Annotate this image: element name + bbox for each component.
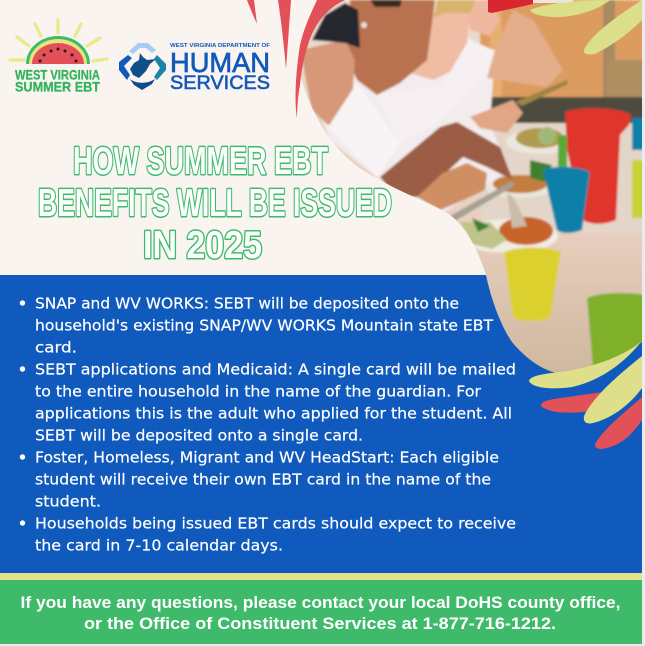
bulleted list [20, 294, 516, 554]
far hand [470, 100, 523, 133]
center white shirt [466, 38, 492, 50]
decorative leaves bottom right [529, 342, 642, 449]
back child [465, 0, 563, 87]
bullet: Foster, Homeless, Migrant and WV HeadStart: Foster, Homeless, Migrant and WV HeadStart: Each eligible [35, 448, 499, 466]
bullet: SEBT applications and Medicaid: SEBT will be deposited onto a single card. [35, 426, 363, 444]
girl face [347, 0, 435, 95]
fork [507, 193, 527, 228]
footer contact text: or the Office of Constituent Services at 1-877-716-1212. [84, 614, 556, 633]
blue content panel [0, 275, 642, 573]
title [38, 140, 392, 267]
logo wordmark [15, 66, 100, 94]
bullet: Households being issued EBT cards: the card in 7-10 calendar days. [35, 536, 283, 554]
title: BENEFITS WILL BE ISSUED [38, 182, 392, 225]
icon: watermelon [26, 36, 90, 64]
photo: children eating lunch [295, 0, 645, 380]
bullet: SNAP and WV WORKS: household's existing SNAP/WV WORKS Mountain state EBT [35, 316, 494, 334]
cutlery held [515, 80, 568, 106]
green cup [586, 292, 642, 366]
red pitcher [565, 108, 631, 224]
girl arm and hand [380, 122, 513, 197]
bullet: Foster, Homeless, Migrant and WV HeadStart: student. [35, 492, 101, 510]
bullet: Foster, Homeless, Migrant and WV HeadStart: student will receive their own EBT card in the name of the [35, 470, 491, 488]
left child [300, 3, 360, 125]
plate back [506, 127, 574, 154]
logo: WV Department of Human Services [119, 43, 270, 94]
near hand [417, 163, 487, 210]
footer contact text [20, 593, 620, 633]
yellow divider band [0, 573, 642, 580]
department wordmark [170, 43, 270, 94]
icon: diamond with state outline [119, 43, 166, 90]
department wordmark: HUMAN [170, 47, 270, 78]
bullet: Households being issued EBT cards: Households being issued EBT cards should expect to receive [35, 514, 516, 532]
department wordmark: WEST VIRGINIA DEPARTMENT OF [170, 43, 270, 49]
blue cup [543, 167, 590, 233]
title: HOW SUMMER EBT [73, 140, 328, 183]
bullet: SNAP and WV WORKS [20, 294, 494, 356]
decorative leaves top right [488, 0, 642, 54]
bullet: SNAP and WV WORKS: SNAP and WV WORKS: SEBT will be deposited onto the [35, 294, 459, 312]
plate middle [486, 160, 554, 198]
logo wordmark: SUMMER EBT [15, 78, 100, 94]
logo wordmark: WEST VIRGINIA [15, 66, 100, 82]
bottom edge strip [0, 644, 645, 646]
right edge strip [642, 0, 645, 646]
yellow cup [504, 248, 561, 321]
footer contact text: If you have any questions, please contact your local DoHS county office, [20, 593, 620, 612]
logo: West Virginia Summer EBT [10, 20, 107, 94]
bullet: SEBT applications and Medicaid: applications this is the adult who applied for the student. All [35, 404, 512, 422]
bullet: SEBT applications and Medicaid: to the entire household in the name of the guardian. For [35, 382, 482, 400]
icon: sun rays [10, 20, 107, 61]
bullet: Households being issued EBT cards [20, 514, 516, 554]
plate front [458, 217, 558, 253]
green straw item [558, 135, 567, 167]
back right yellow cup [632, 160, 645, 218]
title: IN 2025 [143, 224, 262, 267]
knife [450, 181, 514, 221]
back right blue cup [632, 118, 645, 150]
green footer band [0, 580, 642, 644]
left white shirt [329, 89, 355, 126]
bullet: SNAP and WV WORKS: card. [35, 338, 77, 356]
bullet: SEBT applications and Medicaid: SEBT applications and Medicaid: A single card will be mailed [35, 360, 516, 378]
bullet: SEBT applications and Medicaid [20, 360, 516, 444]
bullet: Foster, Homeless, Migrant and WV HeadStart [20, 448, 499, 510]
shirts base [300, 40, 510, 215]
department wordmark: SERVICES [170, 72, 270, 94]
decorative red shapes top [247, 0, 345, 118]
blond child [410, 0, 475, 80]
